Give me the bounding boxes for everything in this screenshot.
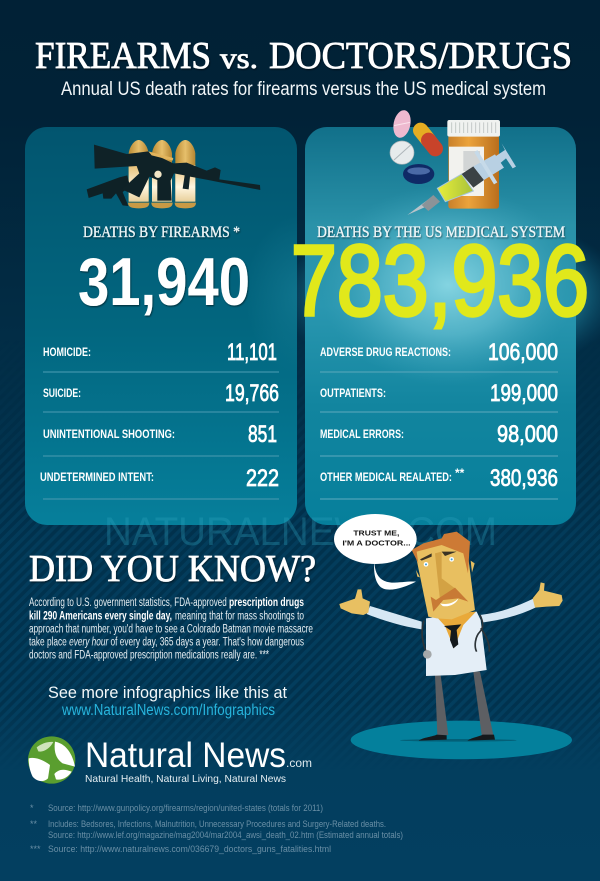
title: DOCTORS/DRUGS xyxy=(269,35,572,77)
logo: Natural News xyxy=(28,736,312,785)
row: suicide: 19,766 xyxy=(225,380,279,407)
row: medical errors xyxy=(320,421,558,448)
head xyxy=(412,532,475,619)
row: adverse drug reactions: ADVERSE DRUG REACTIONS: xyxy=(320,345,451,359)
row: homicide: 11,101 xyxy=(227,339,277,366)
legs xyxy=(435,675,448,735)
row: homicide: HOMICIDE: xyxy=(43,345,91,359)
footnotes: Includes: Bedsores, Infections, Malnutrition, Unnecessary Procedures and Surgery-Related deaths. xyxy=(48,819,386,829)
row: suicide xyxy=(43,380,279,407)
row: other medical realated: OTHER MEDICAL REALATED: xyxy=(320,470,452,484)
text block: did you know body xyxy=(29,597,313,662)
row: other medical realated: ** xyxy=(455,466,465,480)
call to action: www.NaturalNews.com/Infographics xyxy=(61,702,275,719)
coat xyxy=(426,612,487,676)
callout: speech bubble: I'M A DOCTOR... xyxy=(342,541,411,548)
stethoscope xyxy=(422,615,489,654)
title: FIREARMS xyxy=(35,35,211,77)
heading: deaths by the US medical system: DEATHS BY THE US MEDICAL SYSTEM xyxy=(317,224,565,241)
text block: did you know body: According to U.S. government statistics, FDA-approved prescription drugs xyxy=(29,597,304,609)
logo: Natural News: Natural Health, Natural Living, Natural News xyxy=(85,773,286,785)
row: adverse drug reactions xyxy=(320,339,558,366)
right arm xyxy=(480,599,536,622)
callout: speech bubble xyxy=(334,514,417,590)
row: outpatients: OUTPATIENTS: xyxy=(320,386,386,400)
subtitle: Annual US death rates for firearms versus the US medical system xyxy=(61,79,546,100)
footnotes: Source: http://www.lef.org/magazine/mag2004/mar2004_awsi_death_02.htm (Estimated annual totals) xyxy=(48,830,403,840)
illustration: doctor xyxy=(334,514,572,759)
icon: green globe with leaves xyxy=(28,736,75,784)
icon: pills, bottle and syringe xyxy=(390,109,516,215)
spotlight xyxy=(351,721,572,759)
footnotes: ** xyxy=(30,819,38,829)
footnotes: * xyxy=(30,803,34,813)
text block: did you know body: doctors and FDA-approved prescription medications really are. *** xyxy=(29,650,269,662)
row: unintentional shooting xyxy=(43,421,277,448)
call to action xyxy=(48,683,287,719)
footnotes: Source: http://www.naturalnews.com/036679_doctors_guns_fatalities.html xyxy=(48,844,331,854)
callout: speech bubble: TRUST ME, xyxy=(353,531,399,538)
row: other medical realated xyxy=(320,465,558,492)
text block: did you know body: kill 290 Americans every single day,meaning that for mass shootings to xyxy=(29,610,304,622)
row: homicide xyxy=(43,339,277,366)
call to action: See more infographics like this at xyxy=(48,683,287,702)
heading: did you know: DID YOU KNOW? xyxy=(29,548,316,590)
row: unintentional shooting: 851 xyxy=(248,421,277,448)
text block: did you know body: take place every hour of every day, 365 days a year. That's how dangerous xyxy=(29,636,304,648)
row: other medical realated: 380,936 xyxy=(490,465,558,492)
row: outpatients xyxy=(320,380,558,407)
row: medical errors: MEDICAL ERRORS: xyxy=(320,427,404,441)
footnotes xyxy=(30,803,403,854)
heading: deaths by firearms: DEATHS BY FIREARMS * xyxy=(83,224,240,241)
title: vs. xyxy=(220,42,258,75)
row: suicide: SUICIDE: xyxy=(43,386,81,400)
panel: deaths by the US medical system xyxy=(291,109,589,525)
total: 31,940: 31,940 xyxy=(78,244,250,320)
logo: Natural News: .com xyxy=(286,756,312,770)
footnotes: Source: http://www.gunpolicy.org/firearms/region/united-states (totals for 2011) xyxy=(48,803,323,813)
row: undetermined intent: UNDETERMINED INTENT: xyxy=(40,470,154,484)
panel: deaths by firearms xyxy=(25,127,297,525)
footnotes: *** xyxy=(30,844,41,854)
left arm xyxy=(367,606,422,629)
row: undetermined intent: 222 xyxy=(246,465,279,492)
text block: did you know body: approach that number, you'd have to see a Colorado Batman movie massacre xyxy=(29,624,313,636)
icon: bullets and guns xyxy=(87,140,260,208)
row: unintentional shooting: UNINTENTIONAL SHOOTING: xyxy=(43,427,175,441)
row: outpatients: 199,000 xyxy=(490,380,558,407)
watermark: NATURALNEWS.COM xyxy=(104,510,497,554)
title xyxy=(35,35,572,77)
row: medical errors: 98,000 xyxy=(497,421,558,448)
logo: Natural News: Natural News xyxy=(85,736,286,775)
row: adverse drug reactions: 106,000 xyxy=(488,339,558,366)
row: undetermined intent xyxy=(40,465,279,492)
